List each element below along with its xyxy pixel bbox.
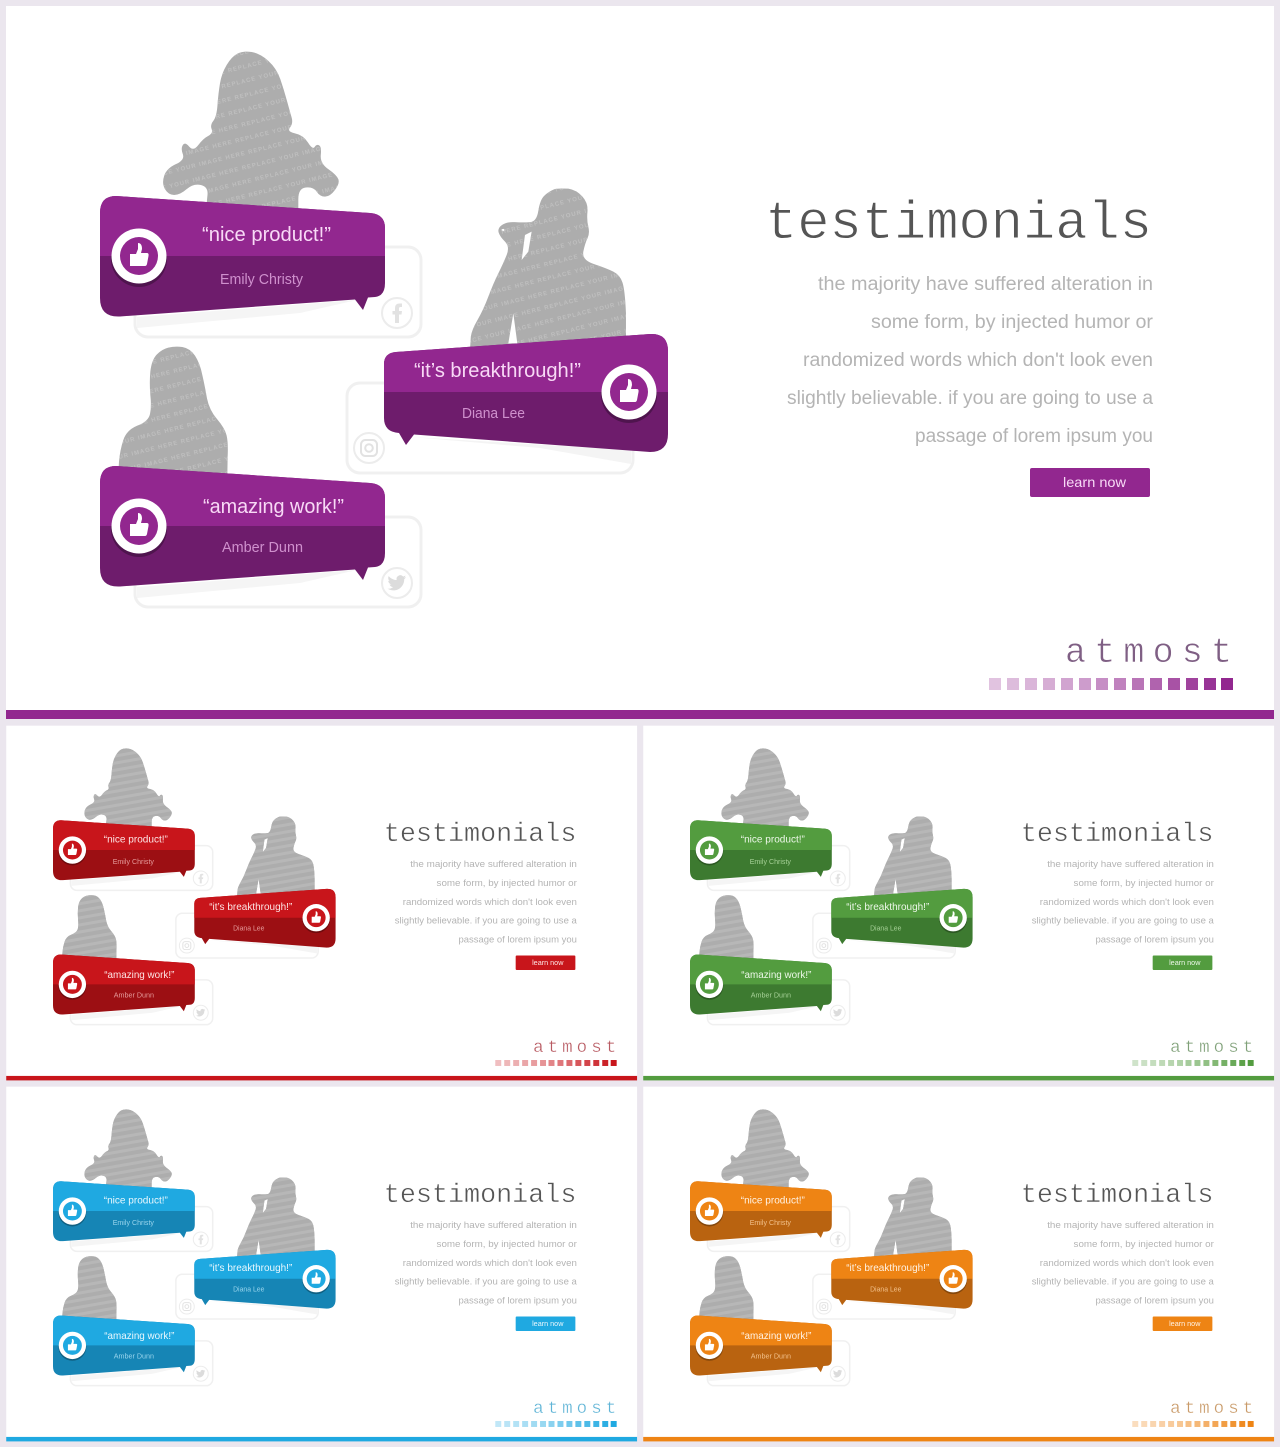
quote: “amazing work!” [104, 1331, 174, 1342]
icon: thumbs up badge [58, 836, 86, 865]
silhouette: person with hand at ear: REPLACE YOUR IMAGE HERE REPLACE YOUR IMAGE HERE [448, 334, 666, 393]
speech bubble [690, 1316, 832, 1376]
silhouette: woman with long hair: REPLACE YOUR IMAGE HERE REPLACE YOUR IMAGE HERE [91, 451, 309, 511]
icon: thumbs up badge [302, 1265, 330, 1294]
name: Emily Christy [113, 857, 154, 866]
name: Diana Lee [233, 924, 264, 933]
speech bubble [100, 466, 385, 587]
speech bubble [53, 1316, 195, 1376]
name: Diana Lee [462, 405, 525, 422]
silhouette: person with hand at ear: REPLACE YOUR IMAGE HERE REPLACE YOUR IMAGE HERE [407, 171, 625, 230]
silhouette: woman with long hair: REPLACE YOUR IMAGE HERE REPLACE YOUR IMAGE HERE [63, 343, 281, 402]
card: amazing work [53, 955, 213, 1025]
body text [1032, 1220, 1215, 1307]
name: Amber Dunn [222, 539, 303, 556]
quote: “nice product!” [202, 224, 331, 246]
icon: facebook [193, 1232, 208, 1247]
speech bubble [53, 1181, 195, 1241]
silhouette: woman with long hair: REPLACE YOUR IMAGE HERE REPLACE YOUR IMAGE HERE [77, 397, 295, 457]
quote: “amazing work!” [741, 970, 811, 981]
body text: passage of lorem ipsum you [458, 935, 577, 946]
silhouette: person with hand at ear: REPLACE YOUR IMAGE HERE REPLACE YOUR IMAGE HERE [454, 318, 672, 377]
body text: slightly believable. if you are going to use a [787, 388, 1153, 409]
quote: “nice product!” [741, 835, 805, 846]
quote: “it’s breakthrough!” [846, 1263, 929, 1274]
silhouette 2 [232, 812, 322, 902]
silhouette: woman with thumbs up: REPLACE YOUR IMAGE HERE REPLACE YOUR IMAGE HERE [152, 178, 370, 238]
quote: “nice product!” [104, 835, 168, 846]
slide panel [6, 726, 637, 1076]
logo: atmost: atmost [533, 1400, 616, 1419]
body text: some form, by injected humor or [437, 878, 577, 889]
card: nice product [690, 1181, 850, 1251]
icon: instagram [816, 1299, 831, 1314]
icon: facebook [830, 871, 845, 886]
silhouette: woman with thumbs up: REPLACE YOUR IMAGE HERE REPLACE YOUR IMAGE HERE [112, 58, 329, 118]
silhouette 1 [78, 1104, 177, 1193]
silhouette 3 [58, 1253, 123, 1322]
body text: randomized words which don't look even [803, 350, 1153, 371]
card: breakthrough [813, 1250, 973, 1319]
button: learn now [516, 1317, 575, 1331]
silhouette: woman with thumbs up: REPLACE YOUR IMAGE HERE REPLACE YOUR IMAGE HERE [105, 31, 323, 91]
card: nice product [53, 1181, 213, 1251]
icon: thumbs up badge [111, 228, 167, 287]
bottom color bar [643, 1076, 1274, 1080]
icon: thumbs up badge [58, 971, 86, 1000]
speech bubble [53, 955, 195, 1015]
bottom color bar [6, 1076, 637, 1080]
silhouette: person with hand at ear [470, 188, 626, 347]
card: amazing work [690, 955, 850, 1025]
button: learn now: learn now [532, 1321, 564, 1328]
silhouette: woman with thumbs up: REPLACE YOUR IMAGE HERE REPLACE YOUR IMAGE HERE [138, 123, 356, 183]
icon: twitter [193, 1005, 208, 1020]
body text: passage of lorem ipsum you [458, 1296, 577, 1307]
body text: the majority have suffered alteration in [410, 1220, 577, 1231]
logo squares [495, 1060, 617, 1066]
body text: randomized words which don't look even [403, 1258, 577, 1269]
body text [395, 1220, 578, 1307]
button: learn now [1153, 1317, 1212, 1331]
silhouette: woman with thumbs up: REPLACE YOUR IMAGE HERE REPLACE YOUR IMAGE HERE [145, 151, 363, 210]
body text: the majority have suffered alteration in [1047, 1220, 1214, 1231]
icon: thumbs up badge [939, 1265, 967, 1294]
icon: thumbs up badge [58, 1197, 86, 1226]
name: Emily Christy [113, 1218, 154, 1227]
silhouette 2 [869, 812, 959, 902]
body text: passage of lorem ipsum you [915, 426, 1153, 447]
name: Emily Christy [750, 1218, 791, 1227]
silhouette: woman with thumbs up: REPLACE YOUR IMAGE HERE REPLACE YOUR IMAGE HERE [145, 194, 363, 254]
icon: instagram [816, 938, 831, 953]
silhouette: woman with long hair: REPLACE YOUR IMAGE HERE REPLACE YOUR IMAGE HERE [84, 424, 302, 484]
logo: atmost: atmost [1065, 633, 1232, 673]
icon: thumbs up badge [601, 364, 657, 423]
speech bubble [194, 889, 336, 948]
body text: slightly believable. if you are going to use a [395, 916, 578, 927]
silhouette: person with hand at ear: REPLACE YOUR IMAGE HERE REPLACE YOUR IMAGE HERE [441, 306, 659, 366]
icon: thumbs up badge [58, 1332, 86, 1361]
speech bubble [690, 820, 832, 880]
body text: the majority have suffered alteration in [410, 859, 577, 870]
logo: atmost: atmost [1170, 1039, 1253, 1058]
silhouette: person with hand at ear: REPLACE YOUR IMAGE HERE REPLACE YOUR IMAGE HERE [414, 198, 632, 257]
icon: instagram [179, 938, 194, 953]
speech bubble [53, 820, 195, 880]
body text: some form, by injected humor or [437, 1239, 577, 1250]
quote: “it’s breakthrough!” [414, 360, 581, 382]
speech bubble [690, 1181, 832, 1241]
slide panel [643, 726, 1274, 1076]
silhouette: person with hand at ear: REPLACE YOUR IMAGE HERE REPLACE YOUR IMAGE HERE [420, 182, 638, 241]
slide: blue [6, 1087, 637, 1441]
button: learn now [1030, 468, 1150, 497]
logo squares [1132, 1060, 1254, 1066]
icon: thumbs up badge [695, 971, 723, 1000]
silhouette: person with hand at ear: REPLACE YOUR IMAGE HERE REPLACE YOUR IMAGE HERE [441, 263, 659, 323]
icon: twitter [382, 568, 412, 598]
name: Amber Dunn [114, 1351, 154, 1360]
body text: some form, by injected humor or [1074, 878, 1214, 889]
body text: some form, by injected humor or [1074, 1239, 1214, 1250]
quote: “it’s breakthrough!” [846, 902, 929, 913]
title: testimonials [765, 194, 1152, 255]
silhouette: woman with long hair [118, 346, 228, 474]
speech bubble [100, 196, 385, 317]
slide: purple main [6, 6, 1274, 719]
body text: randomized words which don't look even [403, 897, 577, 908]
name: Emily Christy [220, 271, 303, 288]
button: learn now: learn now [1169, 1321, 1201, 1328]
silhouette 3 [58, 892, 123, 962]
card: nice product [100, 196, 421, 337]
slide: green [643, 726, 1274, 1080]
silhouette: woman with thumbs up: REPLACE YOUR IMAGE HERE REPLACE YOUR IMAGE HERE [118, 85, 336, 145]
card: breakthrough [813, 889, 973, 958]
icon: twitter [830, 1005, 845, 1020]
icon: thumbs up badge [302, 904, 330, 933]
slide panel [6, 1087, 637, 1437]
body text [395, 859, 578, 946]
silhouette: person with hand at ear: REPLACE YOUR IMAGE HERE REPLACE YOUR IMAGE HERE [427, 209, 645, 269]
title: testimonials [384, 1181, 576, 1211]
silhouette: person with hand at ear: REPLACE YOUR IMAGE HERE REPLACE YOUR IMAGE HERE [434, 279, 652, 339]
silhouette 1 [78, 743, 177, 832]
icon: facebook [193, 871, 208, 886]
icon: thumbs up badge [695, 1197, 723, 1226]
body text: randomized words which don't look even [1040, 897, 1214, 908]
silhouette: woman with long hair: REPLACE YOUR IMAGE HERE REPLACE YOUR IMAGE HERE [71, 413, 289, 473]
body text [1032, 859, 1215, 946]
silhouette 1 [715, 743, 814, 832]
logo squares [1132, 1421, 1254, 1427]
silhouette: woman with long hair: REPLACE YOUR IMAGE HERE REPLACE YOUR IMAGE HERE [70, 370, 288, 430]
speech bubble [831, 1250, 973, 1309]
body text [787, 274, 1154, 447]
body text: randomized words which don't look even [1040, 1258, 1214, 1269]
card: amazing work [690, 1316, 850, 1386]
silhouette 3 [695, 892, 760, 962]
silhouette: woman with long hair: REPLACE YOUR IMAGE HERE REPLACE YOUR IMAGE HERE [50, 331, 268, 391]
logo squares [989, 678, 1233, 690]
body text: the majority have suffered alteration in [818, 274, 1153, 295]
card: nice product [690, 820, 850, 890]
button: learn now: learn now [1063, 474, 1127, 490]
silhouette: person with hand at ear: REPLACE YOUR IMAGE HERE REPLACE YOUR IMAGE HERE [434, 236, 652, 296]
name: Amber Dunn [114, 990, 154, 999]
icon: instagram [179, 1299, 194, 1314]
icon: facebook [382, 298, 412, 328]
body text: slightly believable. if you are going to use a [395, 1277, 578, 1288]
name: Amber Dunn [751, 1351, 791, 1360]
silhouette: woman with thumbs up: REPLACE YOUR IMAGE HERE REPLACE YOUR IMAGE HERE [125, 69, 343, 129]
name: Diana Lee [233, 1285, 264, 1294]
title: testimonials [1021, 1181, 1213, 1211]
speech bubble [690, 955, 832, 1015]
bottom color bar [6, 710, 1274, 719]
silhouette: woman with thumbs up: REPLACE YOUR IMAGE HERE REPLACE YOUR IMAGE HERE [118, 42, 336, 102]
name: Amber Dunn [751, 990, 791, 999]
icon: thumbs up badge [695, 836, 723, 865]
silhouette: woman with long hair: REPLACE YOUR IMAGE HERE REPLACE YOUR IMAGE HERE [77, 440, 295, 500]
quote: “amazing work!” [104, 970, 174, 981]
bottom color bar [643, 1437, 1274, 1441]
silhouette 3 [695, 1253, 760, 1322]
silhouette: person with hand at ear: REPLACE YOUR IMAGE HERE REPLACE YOUR IMAGE HERE [447, 290, 665, 350]
body text: passage of lorem ipsum you [1095, 1296, 1214, 1307]
quote: “amazing work!” [203, 496, 344, 518]
quote: “nice product!” [741, 1196, 805, 1207]
slide panel [6, 6, 1274, 710]
title: testimonials [384, 820, 576, 850]
quote: “nice product!” [104, 1196, 168, 1207]
icon: thumbs up badge [939, 904, 967, 933]
slide: red [6, 726, 637, 1080]
card: amazing work [53, 1316, 213, 1386]
card: breakthrough [176, 889, 336, 958]
button: learn now [516, 956, 575, 970]
logo: atmost: atmost [1170, 1400, 1253, 1419]
card: breakthrough [347, 334, 668, 473]
body text: slightly believable. if you are going to use a [1032, 916, 1215, 927]
speech bubble [194, 1250, 336, 1309]
icon: thumbs up badge [695, 1332, 723, 1361]
speech bubble [831, 889, 973, 948]
silhouette: woman with thumbs up: REPLACE YOUR IMAGE HERE REPLACE YOUR IMAGE HERE [132, 139, 350, 199]
silhouette 1 [715, 1104, 814, 1193]
icon: thumbs up badge [111, 498, 167, 557]
body text: the majority have suffered alteration in [1047, 859, 1214, 870]
icon: instagram [354, 433, 384, 463]
card: nice product [53, 820, 213, 890]
silhouette: person with hand at ear: REPLACE YOUR IMAGE HERE REPLACE YOUR IMAGE HERE [421, 225, 639, 285]
name: Diana Lee [870, 1285, 901, 1294]
name: Emily Christy [750, 857, 791, 866]
slide: orange [643, 1087, 1274, 1441]
bottom color bar [6, 1437, 637, 1441]
button: learn now: learn now [1169, 960, 1201, 967]
silhouette: woman with thumbs up [163, 52, 339, 208]
silhouette 2 [232, 1173, 322, 1263]
silhouette 2 [869, 1173, 959, 1263]
icon: facebook [830, 1232, 845, 1247]
card: amazing work [100, 466, 421, 607]
silhouette: woman with thumbs up: REPLACE YOUR IMAGE HERE REPLACE YOUR IMAGE HERE [139, 167, 357, 226]
silhouette: woman with thumbs up: REPLACE YOUR IMAGE HERE REPLACE YOUR IMAGE HERE [125, 112, 343, 172]
body text: some form, by injected humor or [871, 312, 1154, 333]
speech bubble [384, 334, 668, 452]
icon: twitter [830, 1366, 845, 1381]
logo squares [495, 1421, 617, 1427]
silhouette: woman with long hair: REPLACE YOUR IMAGE HERE REPLACE YOUR IMAGE HERE [64, 386, 282, 446]
silhouette: person with hand at ear: REPLACE YOUR IMAGE HERE REPLACE YOUR IMAGE HERE [427, 252, 645, 312]
quote: “it’s breakthrough!” [209, 902, 292, 913]
title: testimonials [1021, 820, 1213, 850]
silhouette: woman with long hair: REPLACE YOUR IMAGE HERE REPLACE YOUR IMAGE HERE [57, 359, 275, 418]
card: breakthrough [176, 1250, 336, 1319]
quote: “amazing work!” [741, 1331, 811, 1342]
body text: slightly believable. if you are going to use a [1032, 1277, 1215, 1288]
silhouette: woman with thumbs up: REPLACE YOUR IMAGE HERE REPLACE YOUR IMAGE HERE [131, 96, 349, 156]
button: learn now [1153, 956, 1212, 970]
icon: twitter [193, 1366, 208, 1381]
logo: atmost: atmost [533, 1039, 616, 1058]
name: Diana Lee [870, 924, 901, 933]
body text: passage of lorem ipsum you [1095, 935, 1214, 946]
button: learn now: learn now [532, 960, 564, 967]
quote: “it’s breakthrough!” [209, 1263, 292, 1274]
slide panel [643, 1087, 1274, 1437]
